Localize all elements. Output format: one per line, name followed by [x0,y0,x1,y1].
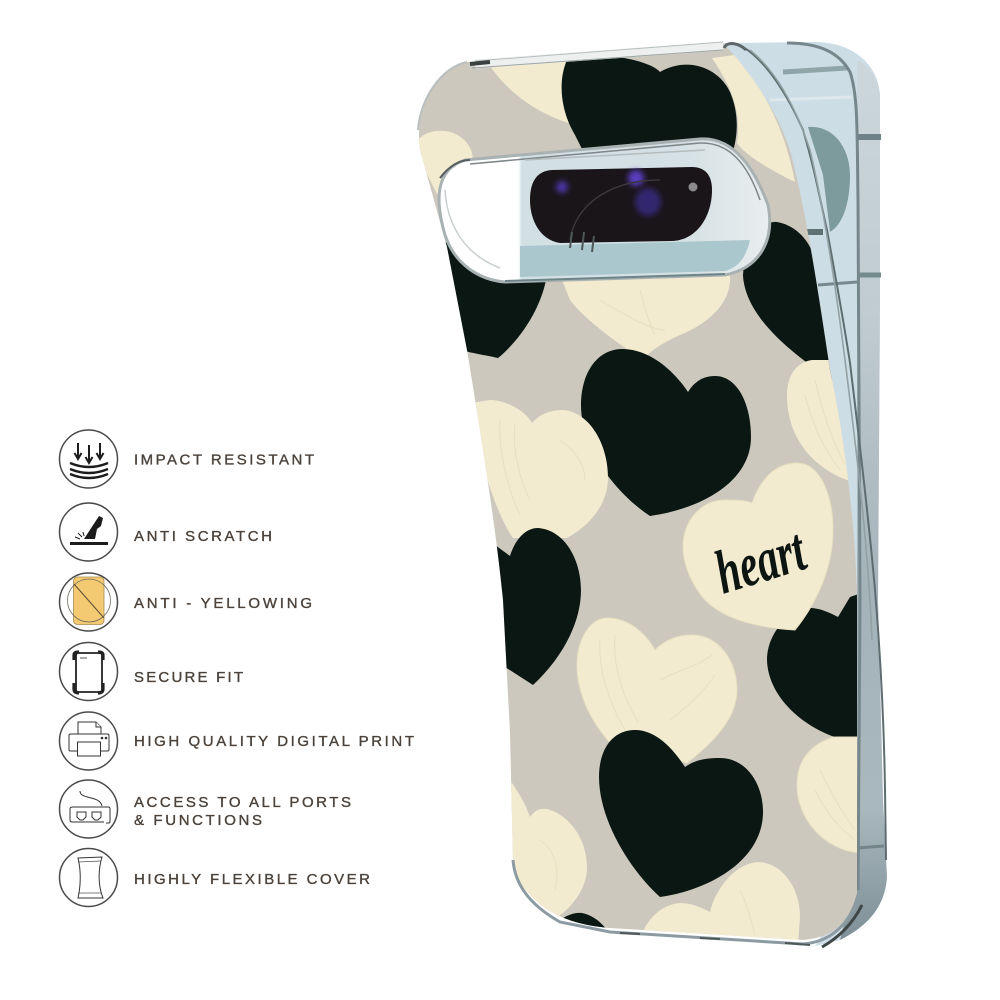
phone body behind case [723,42,887,946]
feature: high quality digital print: HIGH QUALITY DIGITAL PRINT [134,733,414,750]
dark heart right lower [767,594,857,736]
cream heart under lens [560,275,730,360]
feature: anti yellowing: ANTI - YELLOWING [134,595,312,612]
feature: anti yellowing [60,573,312,631]
feature: access to all ports and functions: ACCESS TO ALL PORTS [134,794,351,811]
feature: secure fit: SECURE FIT [134,669,243,686]
feature: access to all ports and functions: & FUNCTIONS [134,812,262,829]
heart script text: heart [707,516,814,607]
small dark heart bottom [563,912,605,928]
feature: high quality digital print [60,712,414,770]
feature: impact resistant [60,430,314,488]
feature: anti scratch [60,503,272,561]
feature: access to all ports and functions [60,780,351,838]
camera ring on phone body [808,127,850,232]
camera cutout lens housing [439,139,770,282]
cream heart right [787,360,848,480]
dark heart left [495,528,581,685]
phone body detail lines [743,43,886,890]
cream heart bottom left [511,782,587,916]
paint texture strokes [500,290,855,935]
cream heart bottom right [797,737,860,853]
cream heart with text [683,463,833,630]
dark heart top [562,58,737,148]
dark heart under lens left [440,240,546,358]
cream heart lower [577,618,737,763]
cream heart bottom centre [643,862,800,945]
feature list [60,430,414,906]
cream heart top right [712,55,795,182]
clear case outline [418,42,862,947]
feature: impact resistant: IMPACT RESISTANT [134,452,314,468]
dark heart centre [581,349,751,516]
printed case back with hearts [419,43,857,940]
phone side strip [840,60,887,940]
lens glass surround [439,139,770,282]
phone case product image [400,30,887,960]
cream heart left edge [418,131,473,200]
lens highlights [556,170,698,252]
lens lower band [520,240,750,277]
cream heart top left [491,62,569,124]
feature: highly flexible cover [60,848,370,906]
feature: secure fit [60,642,243,700]
lens rims [470,143,760,200]
cream heart left [470,400,608,538]
feature: anti scratch: ANTI SCRATCH [134,528,272,545]
dark heart bottom [599,730,763,897]
feature: highly flexible cover: HIGHLY FLEXIBLE COVER [134,871,370,888]
dark heart right [743,222,832,380]
camera window [530,167,712,243]
